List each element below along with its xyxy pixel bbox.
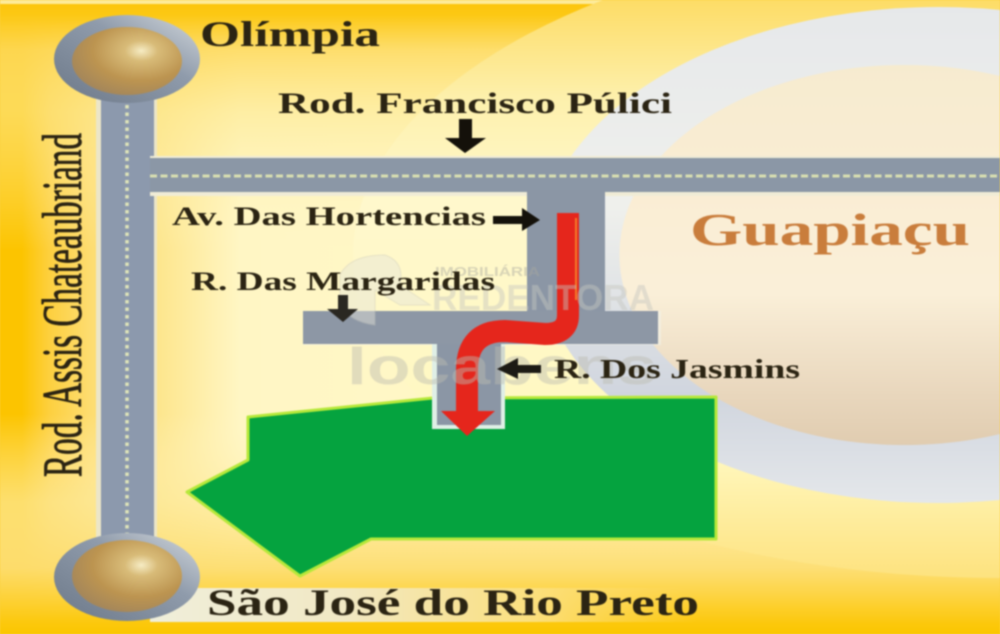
arrow: to Av. Das Hortencias [493, 208, 540, 231]
road: R. Das Margaridas [303, 311, 661, 345]
marker: Olímpia ball [54, 15, 200, 103]
road: Av. Das Hortencias [527, 190, 605, 320]
marker: São José do Rio Preto ball [54, 533, 700, 622]
label: Av. Das Hortencias: Av. Das Hortencias [172, 202, 486, 231]
label: Olímpia: Olímpia [200, 14, 380, 54]
label: Rod. Francisco Púlici: Rod. Francisco Púlici [278, 87, 672, 120]
watermark: Imobiliária Redentora locabens: locabens [347, 338, 657, 396]
arrow: to Rod. Francisco Púlici [445, 119, 486, 153]
arrow: to R. Dos Jasmins [497, 358, 541, 379]
arrow: to R. Das Margaridas [327, 295, 358, 322]
watermark: Imobiliária Redentora locabens [340, 255, 657, 396]
label: Guapiaçu: Guapiaçu [690, 204, 970, 255]
label: São José do Rio Preto: São José do Rio Preto [207, 583, 699, 624]
watermark: Imobiliária Redentora locabens: REDENTORA [432, 277, 654, 318]
panel: Guapiaçu city circle [353, 0, 1000, 578]
route arrow in red [441, 213, 576, 436]
road: R. Dos Jasmins [432, 344, 505, 429]
watermark: Imobiliária Redentora locabens: IMOBILIÁRIA [435, 264, 541, 279]
label: R. Das Margaridas: R. Das Margaridas [191, 267, 495, 296]
road: Rod. Assis Chateaubriand [96, 90, 157, 550]
road: Rod. Francisco Púlici [150, 156, 1000, 196]
label: R. Dos Jasmins: R. Dos Jasmins [554, 354, 800, 384]
development area in green [187, 397, 716, 576]
